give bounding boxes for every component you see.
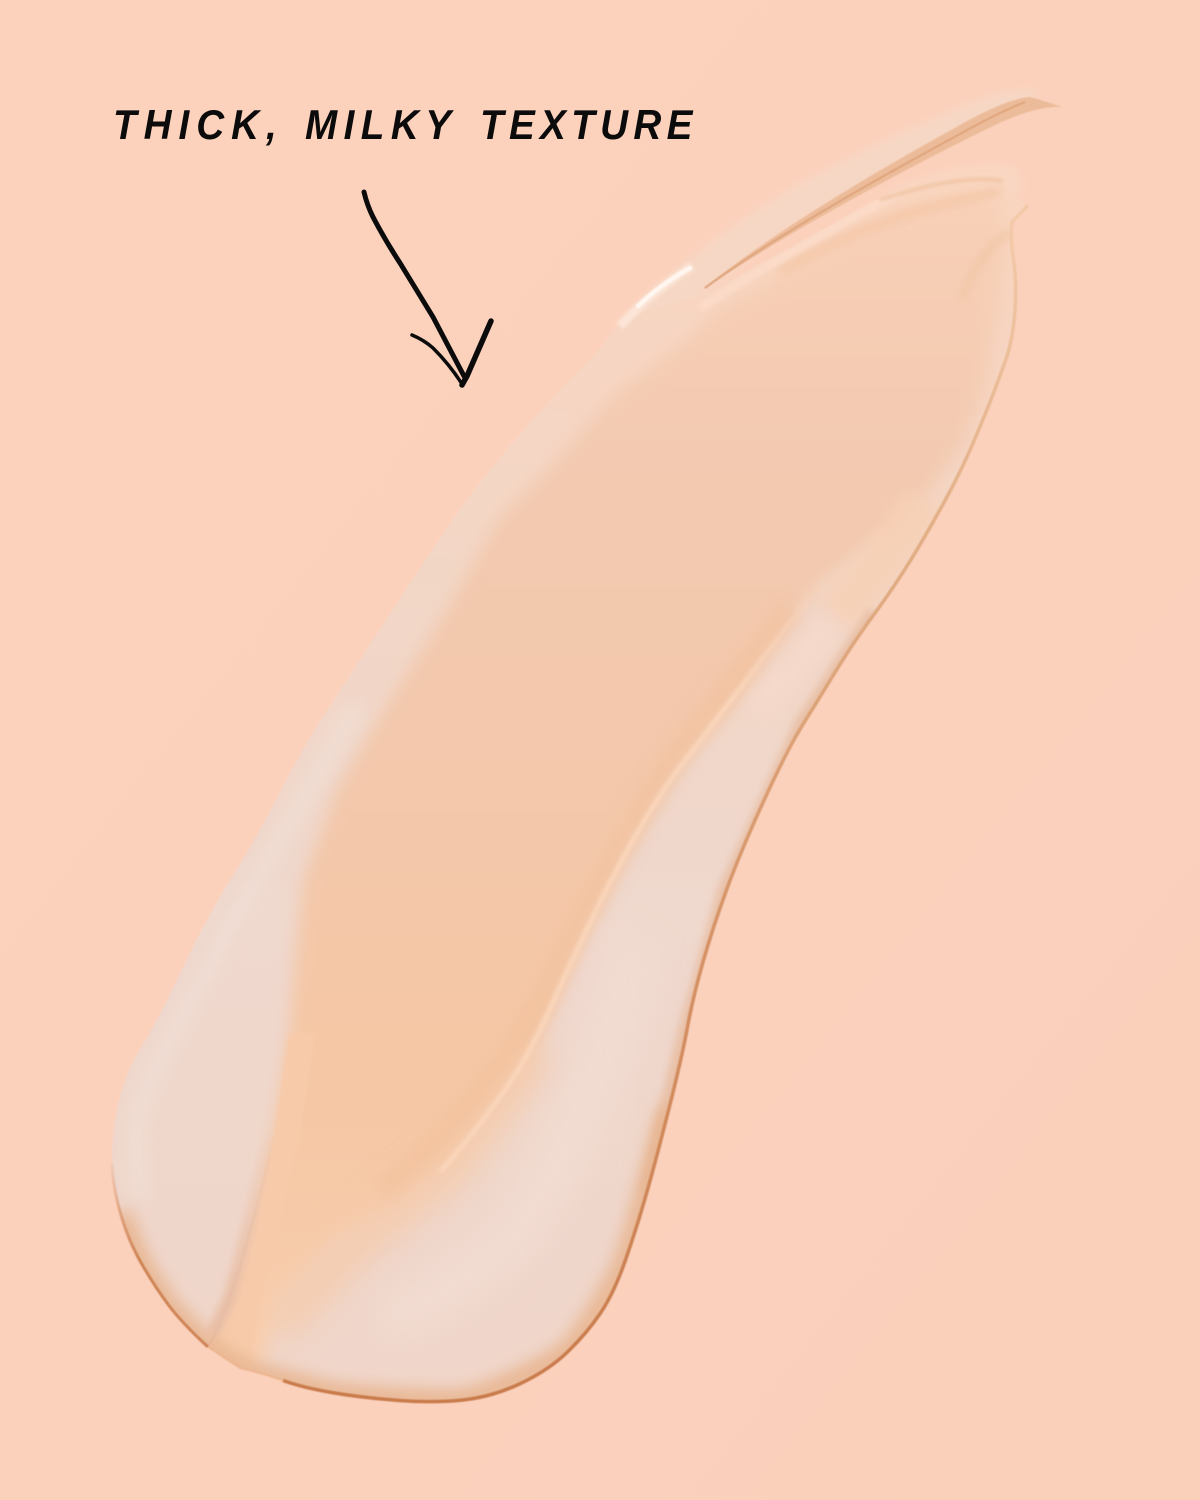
swatch: soft warm lower boundary xyxy=(275,1050,540,1330)
swatch: fold line xyxy=(209,1140,272,1345)
swatch: lower lobe highlight xyxy=(380,940,640,1320)
swatch: warm centre xyxy=(209,195,1005,1367)
swatch: soft halo above tip xyxy=(880,164,1022,200)
title: MILKY xyxy=(305,101,457,148)
swatch: faint warm shoulder xyxy=(835,500,925,615)
swatch: pale bottom tip edge xyxy=(208,1347,283,1380)
swatch: upper orange tone xyxy=(780,192,1000,272)
swatch: top outline xyxy=(880,179,1003,200)
arrow pointing to swatch xyxy=(364,192,491,385)
swatch: left lobe shadow at fold xyxy=(208,1192,256,1334)
swatch: glow around highlight xyxy=(620,266,692,326)
swatch: ridge highlight xyxy=(441,652,768,1170)
swatch: highlight xyxy=(638,268,690,306)
swatch: right tip shading xyxy=(963,232,1008,292)
swatch: light stripe under top edge xyxy=(717,202,883,298)
title xyxy=(113,101,698,148)
swatch: left lobe highlight xyxy=(343,719,352,724)
swatch: top streak xyxy=(700,97,1063,291)
swatch: pale top band xyxy=(605,90,1036,345)
swatch: inner shading along upper lobe edge xyxy=(646,613,875,1193)
product swatch xyxy=(112,90,1063,1402)
swatch: ridge shadow xyxy=(548,612,796,998)
swatch: body base xyxy=(112,178,1028,1402)
swatch: pale right shoulder xyxy=(755,625,830,710)
swatch: streak core xyxy=(705,102,1025,288)
title: TEXTURE xyxy=(480,101,698,148)
swatch: outline edge xyxy=(283,205,1028,1402)
title: THICK, xyxy=(113,101,284,148)
swatch: inner shading along lower edge xyxy=(120,1108,669,1400)
swatch: crisp lower fold xyxy=(259,1035,292,1207)
swatch: lower-left outline edge xyxy=(112,1164,208,1347)
